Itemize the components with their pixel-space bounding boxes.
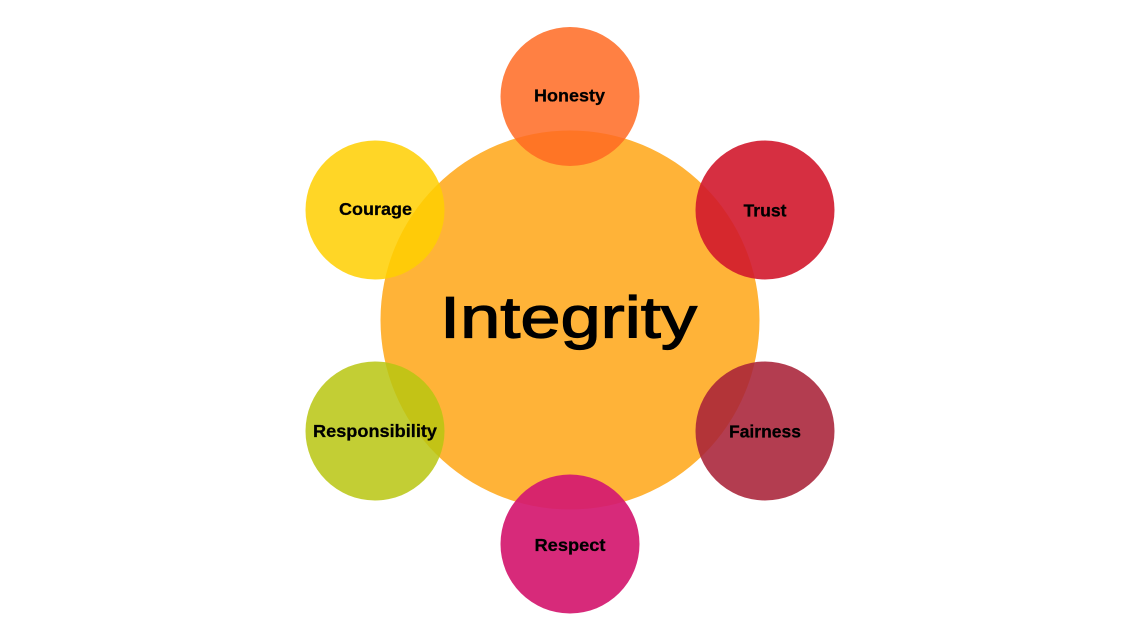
circle: Trust: [696, 140, 834, 280]
circle: Fairness: Fairness: [729, 421, 801, 441]
circle: Trust: Trust: [744, 200, 787, 220]
central title: Integrity: [440, 286, 697, 350]
central circle: [380, 130, 760, 510]
circle: Courage: Courage: [339, 199, 412, 219]
circle: Responsibility: Responsibility: [313, 421, 437, 441]
circle: Responsibility: [306, 362, 444, 500]
circle: Honesty: Honesty: [534, 86, 605, 106]
circle: Courage: [306, 140, 444, 280]
circle: Respect: [500, 474, 640, 614]
circle: Fairness: [696, 362, 834, 500]
circle: Honesty: [500, 27, 640, 166]
circle: Respect: Respect: [534, 535, 606, 555]
